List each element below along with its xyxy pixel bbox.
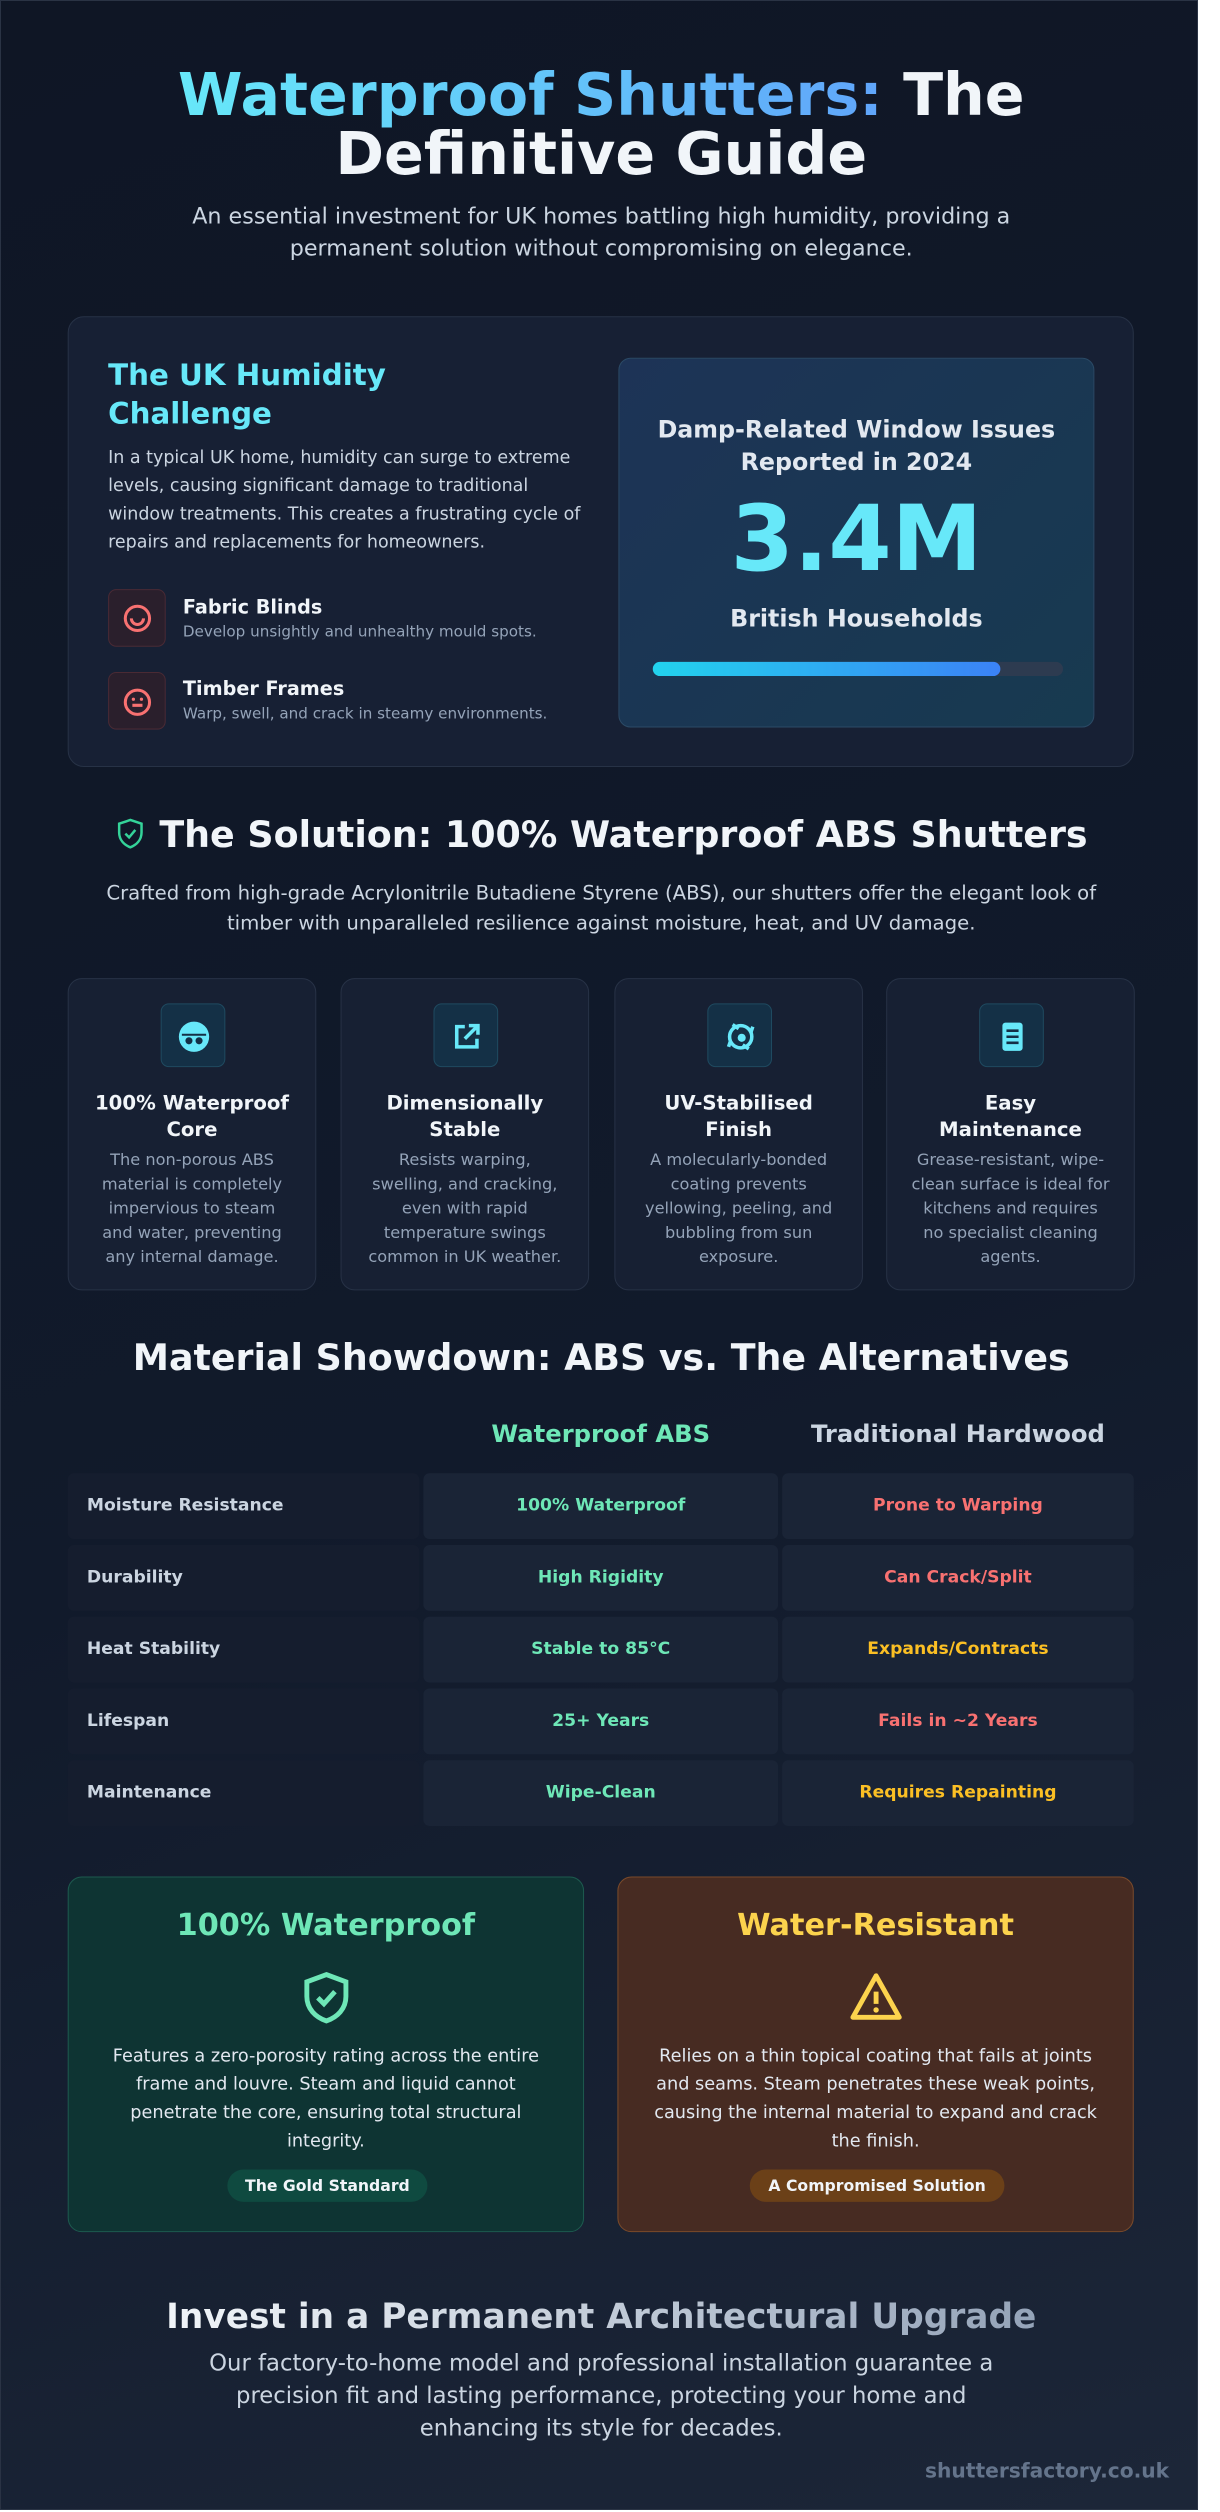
badge <box>227 2170 427 2202</box>
stat label <box>658 415 1055 476</box>
card: dimensionally stable <box>341 978 589 1290</box>
icon: uv <box>707 1003 772 1067</box>
card: waterproof core <box>68 978 316 1290</box>
row: heat: Heat Stability <box>87 1639 220 1659</box>
heading: invest: Invest in a Permanent Architectural Upgrade <box>166 2297 1036 2337</box>
item: timber frames <box>182 678 547 722</box>
row: lifespan: 25+ Years <box>552 1711 649 1731</box>
row: maintenance: Maintenance <box>87 1783 211 1803</box>
item: fabric blinds: Develop unsightly and unhealthy mould spots. <box>183 622 537 641</box>
stat number: 3.4M <box>731 486 982 592</box>
text: invest: Our factory-to-home model and professional installation guarantee a precision fit and lasting performance, protecting your home and enhancing its style for decades. <box>209 2350 993 2441</box>
heading: 100% Waterproof <box>177 1908 475 1943</box>
text: Features a zero-porosity rating across the entire frame and louvre. Steam and liquid cannot penetrate the core, ensuring total structural integrity. <box>113 2046 539 2151</box>
title: Waterproof Shutters: The <box>178 61 1025 129</box>
icon: maintenance <box>979 1003 1044 1067</box>
icon: warning <box>850 1973 902 2020</box>
text: humidity: In a typical UK home, humidity can surge to extreme levels, causing significant damage to traditional window treatments. This creates a frustrating cycle of repairs and replacements for homeowners. <box>108 448 580 553</box>
heading: humidity: The UK Humidity <box>108 358 386 392</box>
icon: stable <box>433 1003 498 1067</box>
heading: humidity: Challenge <box>108 396 272 430</box>
row: durability: Durability <box>87 1567 183 1587</box>
icon: timber frames <box>108 672 166 730</box>
row: moisture: Prone to Warping <box>873 1496 1043 1516</box>
row: moisture: Moisture Resistance <box>87 1496 284 1516</box>
row: maintenance <box>87 1761 1057 1803</box>
card: maintenance: Easy <box>985 1091 1036 1115</box>
heading: showdown: Material Showdown: ABS vs. The Alternatives <box>133 1338 1070 1379</box>
item: timber frames: Timber Frames <box>183 678 344 700</box>
badge: A Compromised Solution <box>768 2177 986 2195</box>
heading: solution: The Solution: 100% Waterproof ABS Shutters <box>159 814 1088 856</box>
panel: 100% waterproof <box>68 1876 584 2232</box>
card: waterproof core: Core <box>166 1118 218 1141</box>
badge: The Gold Standard <box>245 2177 410 2195</box>
row: heat: Stable to 85°C <box>531 1639 670 1659</box>
card: uv <box>614 978 863 1290</box>
stat label: Damp-Related Window Issues <box>658 415 1055 444</box>
card: dimensionally stable: Resists warping, swelling, and cracking, even with rapid temperature swings common in UK weather. <box>368 1150 561 1266</box>
card: waterproof core: The non-porous ABS material is completely impervious to steam and water, preventing any internal damage. <box>102 1150 282 1266</box>
panel: water-resistant <box>617 1876 1134 2232</box>
card: uv: UV-Stabilised <box>664 1091 813 1115</box>
row: durability: Can Crack/Split <box>884 1567 1032 1587</box>
row: moisture <box>87 1474 1134 1539</box>
icon: shield <box>304 1972 348 2024</box>
card: uv: A molecularly-bonded coating prevents yellowing, peeling, and bubbling from sun exposure. <box>645 1150 832 1266</box>
column header: hardwood: Traditional Hardwood <box>811 1420 1105 1448</box>
column header: abs: Waterproof ABS <box>491 1420 710 1448</box>
row: heat: Expands/Contracts <box>867 1639 1049 1659</box>
item: fabric blinds: Fabric Blinds <box>183 596 322 618</box>
card: uv: Finish <box>705 1118 772 1141</box>
row: heat <box>87 1617 1049 1682</box>
card: waterproof core: 100% Waterproof <box>95 1091 289 1115</box>
heading: Water-Resistant <box>737 1908 1014 1943</box>
subtitle: An essential investment for UK homes battling high humidity, providing a permanent solution without compromising on elegance. <box>192 204 1010 262</box>
icon: waterproof <box>161 1003 225 1067</box>
row: maintenance: Wipe-Clean <box>546 1783 656 1803</box>
card: maintenance: Grease-resistant, wipe-clean surface is ideal for kitchens and requires no specialist cleaning agents. <box>911 1150 1110 1266</box>
icon: fabric blinds <box>108 589 166 647</box>
row: maintenance: Requires Repainting <box>859 1783 1057 1803</box>
card: maintenance <box>886 978 1135 1290</box>
card: dimensionally stable: Stable <box>429 1118 500 1141</box>
stat caption: British Households <box>730 604 983 633</box>
title: Definitive Guide <box>335 119 867 188</box>
text: solution: Crafted from high-grade Acrylonitrile Butadiene Styrene (ABS), our shutters offer the elegant look of timber with unparalleled resilience against moisture, heat, and UV damage. <box>106 881 1096 935</box>
table header <box>491 1420 1105 1448</box>
title <box>178 61 1025 188</box>
badge <box>750 2170 1004 2202</box>
progress bar <box>653 662 1063 676</box>
row: durability <box>87 1545 1034 1610</box>
row: lifespan <box>87 1688 1038 1754</box>
card: dimensionally stable: Dimensionally <box>386 1091 543 1115</box>
row: lifespan: Lifespan <box>87 1711 169 1731</box>
row: lifespan: Fails in ~2 Years <box>878 1711 1038 1731</box>
item: timber frames: Warp, swell, and crack in steamy environments. <box>183 704 547 722</box>
card: maintenance: Maintenance <box>939 1118 1082 1141</box>
heading: humidity <box>108 358 386 430</box>
row: durability: High Rigidity <box>538 1567 664 1587</box>
footer: url: shuttersfactory.co.uk <box>925 2459 1169 2483</box>
item: fabric blinds <box>183 596 537 641</box>
stat box <box>618 358 1094 728</box>
row: moisture: 100% Waterproof <box>516 1496 685 1516</box>
text: Relies on a thin topical coating that fails at joints and seams. Steam penetrates these weak points, causing the internal material to expand and crack the finish. <box>654 2046 1097 2151</box>
panel: humidity challenge <box>68 316 1134 767</box>
stat label: Reported in 2024 <box>741 448 972 476</box>
